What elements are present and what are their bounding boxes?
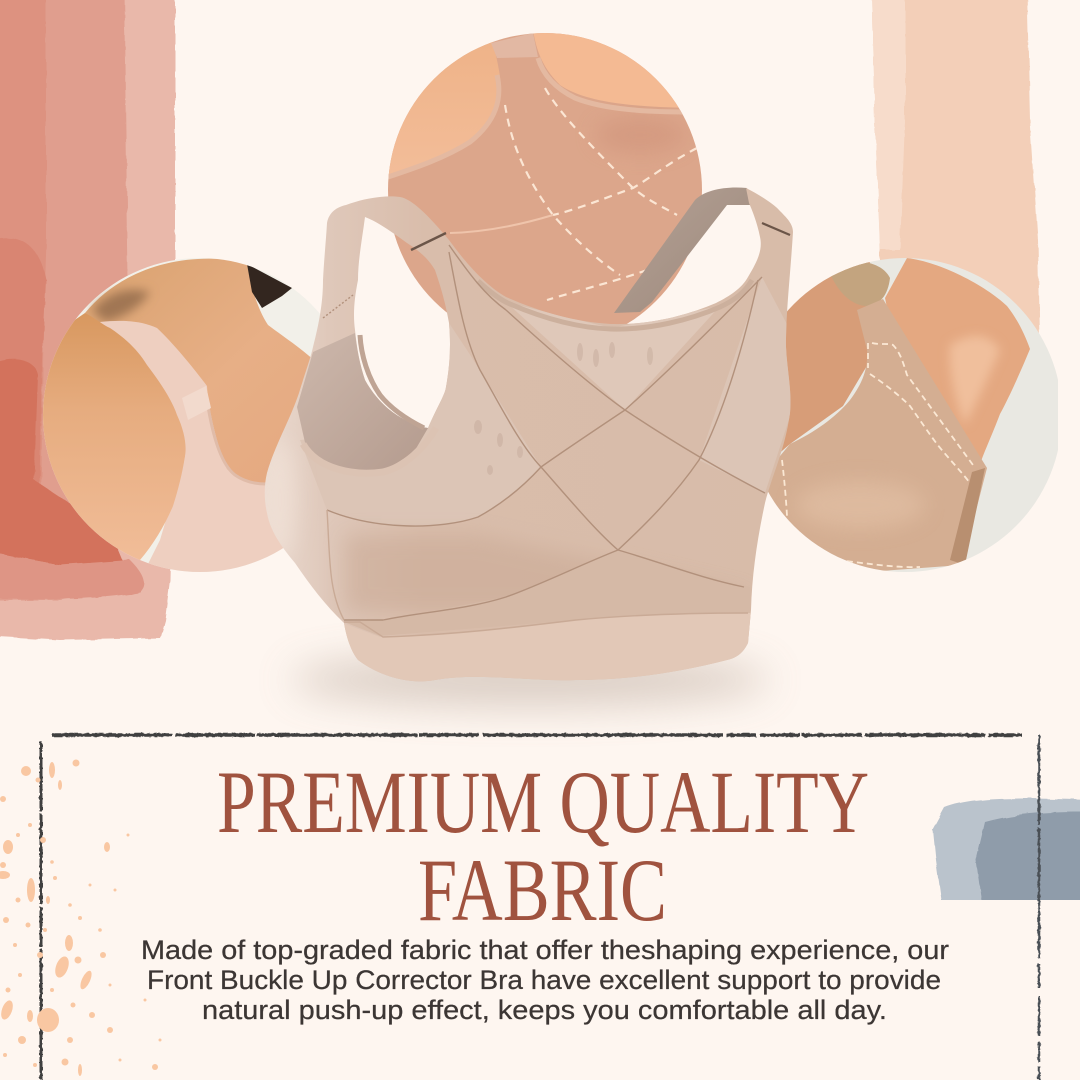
title line 1: PREMIUM QUALITY [217, 754, 869, 852]
circle: left shoulder strap detail [43, 258, 320, 572]
back strap [614, 188, 752, 313]
neck skin [781, 262, 870, 452]
body text [141, 935, 949, 1025]
left strap inner binding [360, 335, 424, 428]
seams [323, 245, 765, 637]
hair [247, 264, 292, 308]
stitched dashes [505, 88, 697, 300]
bottom band [344, 613, 751, 681]
bust highlight [277, 468, 290, 530]
body line 1: Made of top-graded fabric that offer theshaping experience, our [141, 935, 949, 965]
bra body [265, 188, 793, 681]
neckline bands [385, 75, 499, 178]
bra fabric [100, 320, 283, 572]
fabric shading [608, 122, 673, 148]
blob flat bottom mask [925, 900, 1080, 912]
body line 2: Front Buckle Up Corrector Bra have excellent support to provide [147, 965, 941, 995]
skin right of strap [534, 33, 678, 108]
frame: left rough line [40, 742, 42, 1080]
armhole binding [303, 428, 436, 473]
mesh speckles [474, 342, 653, 475]
back skin [85, 258, 310, 482]
strap connector [182, 386, 211, 420]
paint splatter [0, 760, 162, 1076]
skin left of strap [388, 42, 500, 175]
watercolor: left red stripes [0, 0, 176, 640]
neckline band [207, 409, 266, 486]
frame: top rough line [52, 733, 1022, 737]
stitched dashes [782, 343, 973, 567]
mid shading [342, 533, 586, 614]
fabric highlight [806, 486, 914, 524]
mesh panels [513, 306, 714, 409]
bra product [264, 188, 793, 690]
circle: top detail of fabric back [388, 33, 702, 324]
lower panel [348, 577, 664, 636]
right buckle [762, 223, 790, 235]
bra fabric [760, 299, 987, 580]
circle: right back seam detail [768, 258, 1058, 572]
underarm shadow [92, 290, 150, 322]
bra interior [297, 333, 428, 472]
body line 3: natural push-up effect, keeps you comfortable all day. [202, 995, 887, 1025]
underarm highlight [950, 336, 1000, 425]
watercolor: right peach stripe [872, 0, 1040, 360]
left buckle [411, 233, 446, 250]
hair [828, 261, 890, 306]
neck binding [478, 280, 752, 329]
top strap [491, 33, 538, 58]
title [217, 754, 869, 940]
watercolor: blue-grey blob [933, 798, 1080, 904]
arm skin [885, 258, 1030, 464]
frame: right rough line [1038, 735, 1040, 1080]
foreground arm [43, 313, 186, 560]
side panel [950, 468, 985, 565]
title line 2: FABRIC [418, 842, 667, 940]
product shadow [290, 654, 770, 706]
